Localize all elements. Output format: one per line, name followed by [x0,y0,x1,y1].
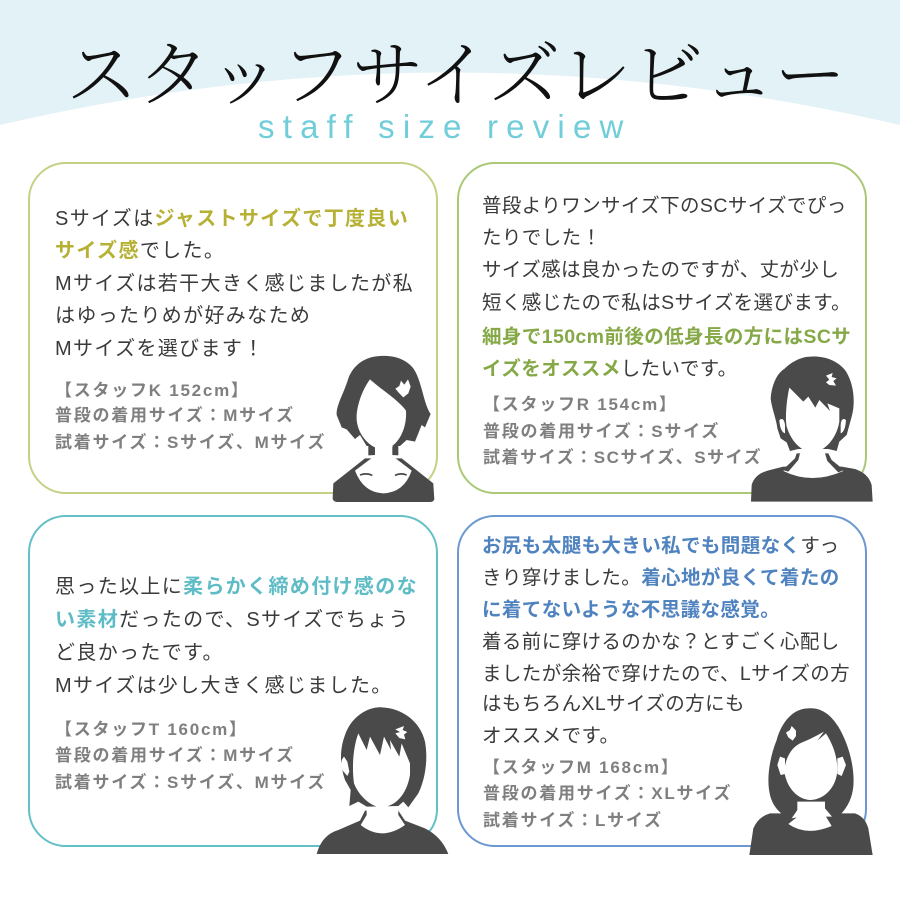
review text R: 細身で150cm前後の低身長の方にはSCサ [482,326,851,348]
staff info M: 普段の着用サイズ：XLサイズ [483,784,732,803]
review text R: たりでした！ [482,227,601,249]
review text T: 思った以上に柔らかく締め付け感のな [55,576,418,598]
staff info K: 【スタッフK 152cm】 [55,381,250,400]
review text M: はもちろんXLサイズの方にも [482,693,745,715]
review text M: きり穿けました。着心地が良くて着たの [482,567,840,589]
review text T [55,576,418,697]
review text R: 普段よりワンサイズ下のSCサイズでぴっ [482,195,847,217]
panel: staff T review [28,515,448,854]
review text M: お尻も太腿も大きい私でも問題なくすっ [482,535,839,557]
review text M: オススメです。 [482,725,619,747]
staff info T: 【スタッフT 160cm】 [55,720,248,739]
review text M: に着てないような不思議な感覚。 [482,599,780,621]
review text K: Mサイズは若干大きく感じましたが私 [55,273,414,295]
staff info M: 試着サイズ：Lサイズ [483,811,663,830]
staff info R: 【スタッフR 154cm】 [483,395,678,414]
staff info R: 試着サイズ：SCサイズ、Sサイズ [483,448,762,467]
staff info R: 普段の着用サイズ：Sサイズ [483,422,720,441]
review text T: Mサイズは少し大きく感じました。 [55,675,393,697]
review text K: Sサイズはジャストサイズで丁度良い [55,208,409,230]
staff info K [55,381,326,452]
staff info T: 試着サイズ：Sサイズ、Mサイズ [55,773,326,792]
staff info M [483,758,732,830]
staff info R [483,395,762,467]
review text K: サイズ感でした。 [55,240,225,262]
review text M: 着る前に穿けるのかな？とすごく心配し [482,631,840,653]
review text K: はゆったりめが好みなため [55,305,311,327]
staff info K: 普段の着用サイズ：Mサイズ [55,406,295,425]
review text R [482,195,851,380]
subtitle: staff size review [258,108,632,145]
review text K: Mサイズを選びます！ [55,338,265,360]
review text R: 短く感じたので私はSサイズを選びます。 [482,292,851,314]
review text T: い素材だったので、Sサイズでちょう [55,609,410,631]
title: スタッフサイズレビュー [66,36,846,116]
review text K [55,208,414,360]
panel: staff K review [28,162,438,502]
review text M: ましたが余裕で穿けたので、Lサイズの方 [482,663,850,685]
staff info K: 試着サイズ：Sサイズ、Mサイズ [55,433,326,452]
review text T: ど良かったです。 [55,642,224,664]
review text R: イズをオススメしたいです。 [482,358,738,380]
staff info T [55,720,326,792]
panel: staff M review [457,515,873,855]
review text M [482,535,850,747]
panel: staff R review [457,162,873,502]
staff info M: 【スタッフM 168cm】 [483,758,680,777]
staff info T: 普段の着用サイズ：Mサイズ [55,746,295,765]
review text R: サイズ感は良かったのですが、丈が少し [482,259,839,281]
